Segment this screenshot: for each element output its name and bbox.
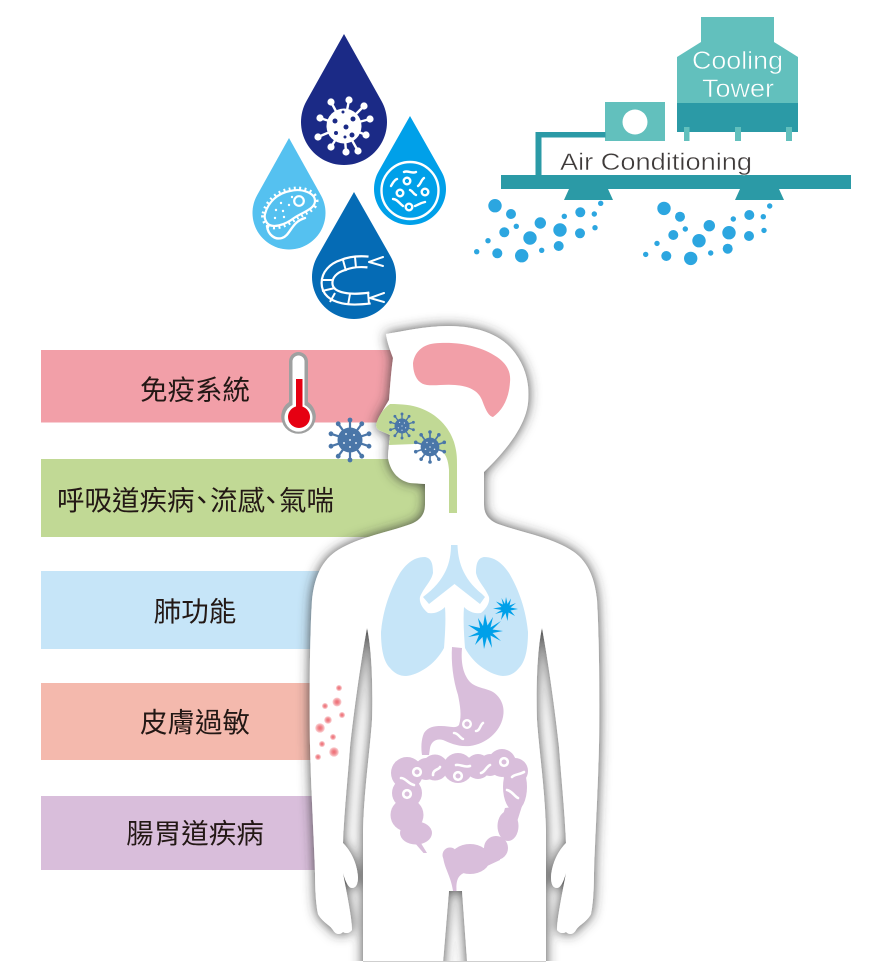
- drop: bacterium: [252, 138, 326, 249]
- virus: nasal cavity small: [389, 413, 415, 439]
- droplets right: [643, 202, 772, 265]
- large intestine: [390, 749, 528, 891]
- human body silhouette: [310, 326, 599, 975]
- bar: respiratory disease: 、: [188, 485, 216, 516]
- cooling tower: [677, 17, 798, 141]
- irritation star large: [468, 614, 503, 649]
- drop: legionella worm: [312, 192, 396, 319]
- drop: microbes in petri dish: [374, 116, 446, 225]
- rash dots: [315, 685, 345, 760]
- airway: [376, 404, 457, 513]
- bar: skin allergy: [41, 683, 331, 760]
- bar: respiratory disease: 氣喘: [279, 485, 334, 516]
- bar: lung function: 肺功能: [154, 596, 236, 627]
- droplets left: [474, 199, 603, 262]
- air duct and pipe: [501, 132, 851, 200]
- virus: throat: [414, 430, 446, 464]
- bar: respiratory disease: 呼吸道疾病: [57, 485, 194, 516]
- brain: [413, 343, 510, 417]
- thermometer: [281, 352, 316, 434]
- air conditioning label: Air Conditioning: [560, 149, 752, 176]
- bar: gastrointestinal disease: [41, 796, 331, 870]
- bar: respiratory disease: [41, 459, 441, 537]
- bar: respiratory disease: 、: [257, 485, 284, 516]
- bar: gastrointestinal disease: 腸胃道疾病: [126, 818, 264, 849]
- bar: immune system: 免疫系統: [140, 374, 250, 406]
- cooling tower: Cooling: [692, 47, 783, 75]
- bar: immune system: [41, 350, 401, 422]
- bar: lung function: [41, 571, 341, 649]
- lungs: [381, 545, 528, 676]
- cooling tower: Tower: [702, 75, 774, 103]
- virus: outside nose: [329, 418, 371, 462]
- drop: virus: [301, 34, 387, 165]
- bar: skin allergy: 皮膚過敏: [140, 707, 250, 738]
- stomach: [421, 647, 504, 755]
- irritation star small: [493, 597, 518, 621]
- bar: respiratory disease: 流感: [210, 485, 265, 516]
- fan unit: [605, 102, 665, 141]
